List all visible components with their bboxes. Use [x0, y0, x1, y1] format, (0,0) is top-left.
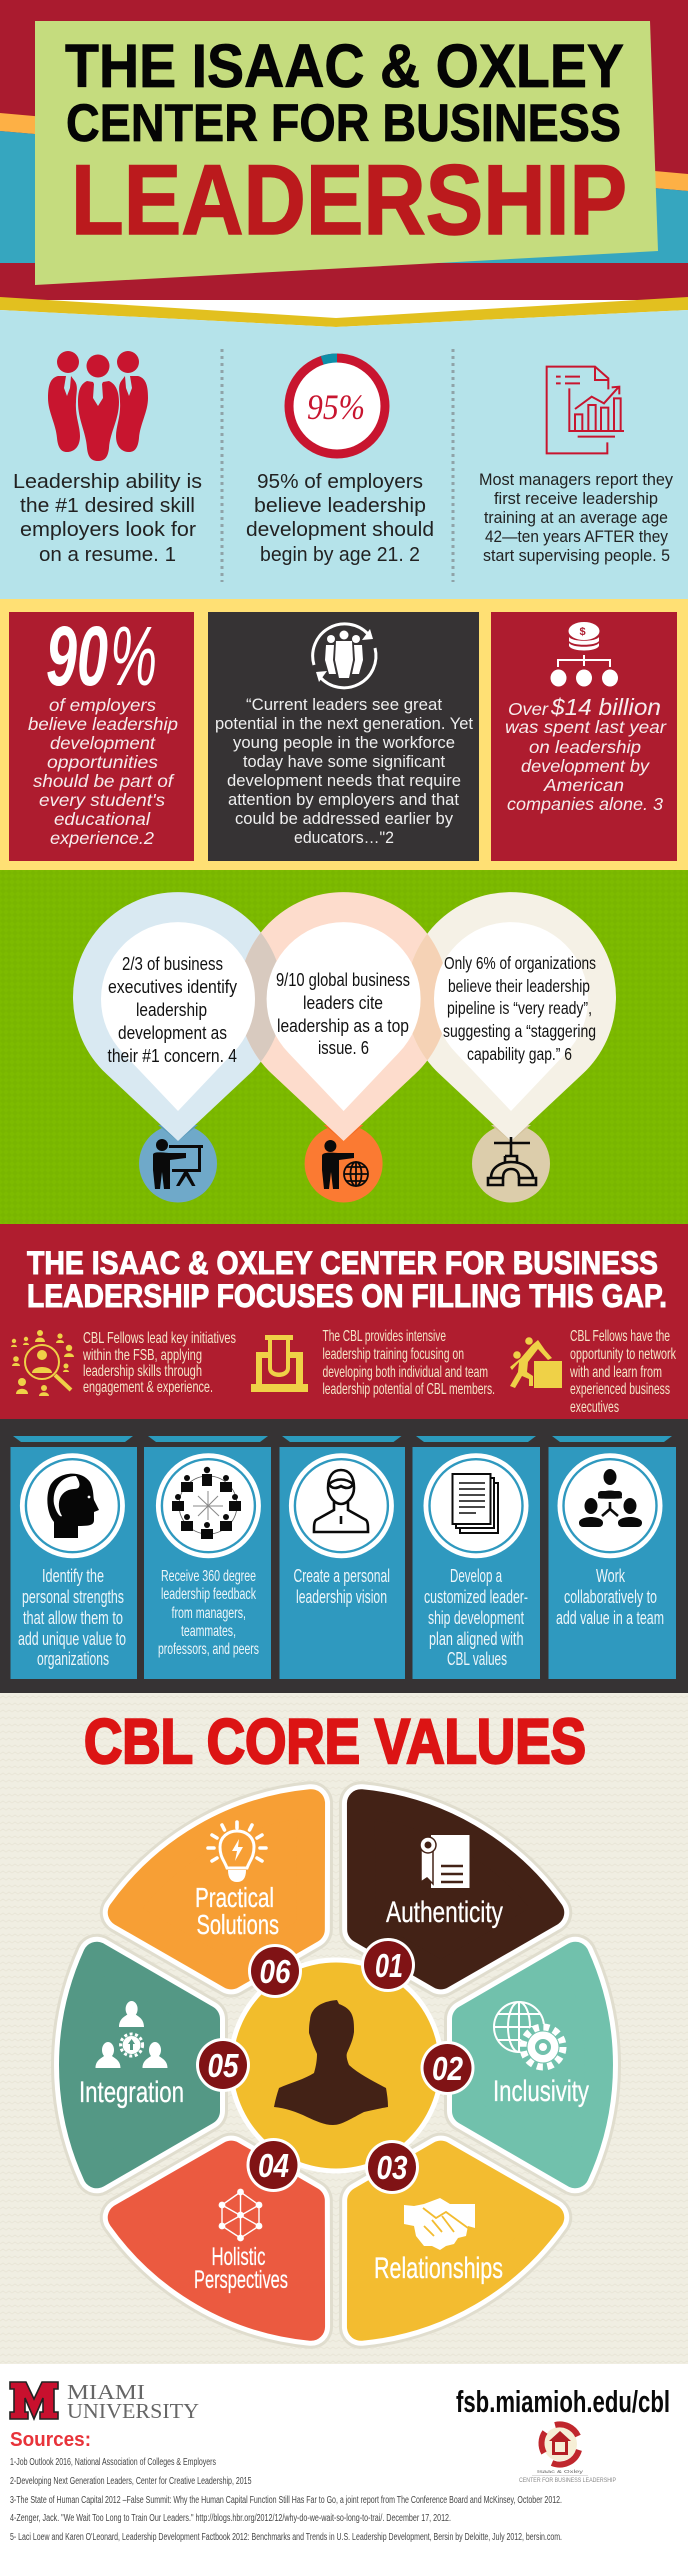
heading: CBL core values: CBL CORE VALUES [84, 1707, 586, 1777]
card: leadership vision [280, 1447, 405, 1679]
badge 03: 03 [376, 2149, 408, 2186]
text: fellows network: executives [570, 1399, 619, 1416]
panel: 90 percent: experience.2 [50, 828, 154, 848]
badge 06: 06 [260, 1953, 291, 1990]
text: quote: today have some significant [243, 753, 445, 771]
text: intensive training: developing both individual and team [322, 1364, 488, 1381]
text: team collaboration [556, 1565, 664, 1628]
title: THE ISAAC & OXLEY [65, 32, 624, 100]
icon: three connected people [579, 1469, 642, 1527]
text: intensive training [322, 1328, 495, 1398]
text: 360 feedback: Receive 360 degree [161, 1568, 256, 1585]
badge 02: 02 [432, 2050, 464, 2087]
heading [27, 1245, 667, 1314]
panel: 90 percent: should be part of [33, 771, 175, 791]
panel: 90 percent: educational [54, 809, 151, 829]
text: leadership ability: on a resume. 1 [39, 544, 176, 566]
label: authenticity: Authenticity [386, 1896, 503, 1929]
text: leadership ability: employers look for [20, 519, 196, 541]
text: 360 feedback [158, 1568, 259, 1658]
text: billion spent: companies alone. 3 [507, 794, 663, 814]
panel: 90 percent: % [110, 609, 157, 703]
header banner [0, 0, 688, 327]
label: relationships: Relationships [374, 2252, 503, 2285]
chart: 95 percent donut [284, 354, 390, 458]
text: leadership ability: the #1 desired skill [20, 495, 195, 517]
icon: magnifier with people [11, 1330, 74, 1396]
panel: filling the gap [0, 1224, 688, 1419]
text: quote: could be addressed earlier by [235, 810, 454, 828]
pin 1: 2/3 of business [122, 954, 223, 974]
logo: center for business leadership: Isaac & Oxley [537, 2469, 584, 2474]
icon: person with globe [322, 1140, 368, 1189]
sources heading: Sources: [10, 2429, 91, 2451]
card: 360 feedback [144, 1447, 271, 1679]
text: leadership vision [294, 1565, 390, 1607]
label: holistic perspectives [194, 2243, 288, 2294]
text: billion spent: American [543, 775, 624, 795]
text: managers report: training at an average age [484, 509, 668, 527]
chart: 95 percent donut: 95% [307, 387, 365, 427]
text: quote: educators…"2 [294, 829, 394, 847]
pin 1: development as [118, 1023, 227, 1043]
pin outlines [73, 892, 616, 1141]
text: intensive training: leadership potential of CBL members. [322, 1381, 495, 1398]
segment 04 holistic perspectives [110, 2123, 366, 2347]
panel: core values [0, 1693, 688, 2364]
badge 05 [196, 2038, 250, 2092]
label: practical solutions [195, 1882, 279, 1940]
text: 95 percent of employers: begin by age 21. 2 [260, 544, 420, 566]
pin 3: believe their leadership [448, 976, 590, 996]
text: fellows lead: leadership skills through [83, 1363, 202, 1380]
label: holistic perspectives: Holistic [212, 2243, 266, 2271]
text: quote [215, 696, 473, 847]
text: quote: potential in the next generation. Yet [215, 715, 473, 733]
text: fellows lead: CBL Fellows lead key initiatives [83, 1330, 236, 1347]
text: 95 percent of employers: 95% of employers [257, 471, 423, 493]
icon circles [139, 1124, 550, 1202]
icon: light bulb [208, 1822, 266, 1882]
icon: training u shape [251, 1335, 308, 1392]
text: managers report: Most managers report they [479, 471, 674, 489]
text: managers report [479, 471, 674, 565]
sources list: 1-Job Outlook 2016, National Association of Colleges & Employers [10, 2457, 216, 2468]
text: fellows network [569, 1328, 677, 1416]
title panel [35, 21, 658, 285]
panel: 90 percent: every student's [39, 790, 165, 810]
panel: 90 percent: development [50, 733, 156, 753]
pin 1: executives identify [108, 977, 237, 997]
logo: Miami University: MIAMI [67, 2380, 145, 2404]
title [65, 32, 627, 255]
badge 01 [361, 1938, 415, 1992]
text: development plan: Develop a [450, 1565, 502, 1586]
icon: globe and gear [494, 2002, 566, 2070]
text: 95 percent of employers: believe leadership [254, 495, 426, 517]
badge 04: 04 [258, 2147, 289, 2184]
panel: program benefits [0, 1419, 688, 1693]
icon: handshake [404, 2198, 475, 2250]
text: billion spent: on leadership [529, 737, 641, 757]
text: 360 feedback: from managers, [172, 1605, 246, 1622]
text: leadership vision: Create a personal [294, 1565, 390, 1586]
badge 01: 01 [375, 1947, 403, 1984]
segment 03 relationships [306, 2123, 562, 2347]
panel: quote [208, 612, 479, 861]
segment 02 inclusivity [466, 1956, 599, 2174]
icon: leadership circle [172, 1467, 241, 1539]
text: managers report: first receive leadership [494, 490, 658, 508]
icon: coins and tree: $ [580, 626, 586, 638]
pin 1: leadership [136, 1000, 207, 1020]
icon: certificate [420, 1835, 470, 1888]
text: development plan [424, 1565, 528, 1669]
logo: center for business leadership [519, 2424, 616, 2484]
wheel outline [73, 1783, 599, 2347]
pin 1: their #1 concern. 4 [108, 1046, 237, 1066]
panel: 90 percent [9, 609, 194, 861]
panel: 90 percent: 90 [46, 609, 108, 703]
panel: 90 percent: of employers [49, 695, 156, 715]
text: leadership ability: Leadership ability is [13, 471, 202, 493]
text: personal strengths: organizations [37, 1648, 109, 1669]
segment 05 integration [73, 1956, 206, 2174]
icon: people with circular arrows [313, 624, 376, 688]
logo: Miami University: UNIVERSITY [67, 2399, 199, 2423]
panel: 90 percent: believe leadership [28, 714, 178, 734]
text: leadership ability [13, 471, 202, 566]
icon: head [47, 1474, 99, 1538]
text: personal strengths [18, 1565, 126, 1669]
center circle with person silhouette [228, 1958, 444, 2174]
icon: report with chart [547, 367, 624, 453]
text: 95 percent of employers [246, 471, 434, 566]
pin 2: leaders cite [303, 993, 383, 1013]
text: personal strengths: personal strengths [22, 1586, 124, 1607]
text: personal strengths: Identify the [42, 1565, 104, 1586]
icon: outline person [314, 1470, 368, 1532]
icon: climbing onto box [510, 1337, 562, 1388]
sources list: 2-Developing Next Generation Leaders, Center for Creative Leadership, 2015 [10, 2476, 252, 2487]
segment 01 authenticity [306, 1783, 562, 2007]
panel: 14 billion [491, 612, 677, 861]
badge 02 [420, 2041, 474, 2095]
icon: pipe valve [488, 1137, 536, 1185]
text: 360 feedback: professors, and peers [158, 1641, 259, 1658]
sources list: 4-Zenger, Jack. "We Wait Too Long to Train Our Leaders." http://blogs.hbr.org/2012/12/why-do-we-wait-so-long-to-trai/. December 17, 2012. [10, 2513, 451, 2524]
badge 03 [365, 2140, 419, 2194]
title: CENTER FOR BUSINESS [66, 94, 621, 153]
text: quote: young people in the workforce [233, 734, 455, 752]
icon: people and gear [96, 2001, 168, 2068]
icon: presenter [153, 1139, 203, 1189]
badge 06 [248, 1944, 302, 1998]
badge 05: 05 [208, 2047, 239, 2084]
text: quote: “Current leaders see great [246, 696, 442, 714]
pin 2: issue. 6 [318, 1038, 369, 1058]
text: 360 feedback: leadership feedback [161, 1586, 257, 1603]
text: quote: attention by employers and that [228, 791, 459, 809]
card: team collaboration [548, 1447, 676, 1679]
footer [0, 2364, 688, 2560]
card: personal strengths [10, 1447, 137, 1679]
text: team collaboration: Work [596, 1565, 626, 1586]
text: development plan: customized leader- [424, 1586, 528, 1607]
text: managers report: 42—ten years AFTER they [485, 528, 669, 546]
text: leadership vision: leadership vision [296, 1586, 387, 1607]
label: holistic perspectives: Perspectives [194, 2266, 288, 2294]
pin 2 [267, 922, 421, 1111]
text: 95 percent of employers: development should [246, 519, 434, 541]
icon: documents [452, 1474, 498, 1533]
pin 3 [434, 922, 596, 1111]
text: quote: development needs that require [227, 772, 461, 790]
panel: yellow band of key facts [0, 599, 688, 870]
label: practical solutions: Practical [195, 1882, 274, 1913]
pin 3: capability gap.” 6 [467, 1044, 572, 1064]
panel: 90 percent: opportunities [47, 752, 158, 772]
text: 360 feedback: teammates, [181, 1623, 236, 1640]
icon: network [219, 2189, 262, 2241]
text: intensive training: The CBL provides intensive [322, 1328, 446, 1345]
text: billion spent: $14 billion [550, 694, 661, 720]
panel: green pins [0, 870, 688, 1224]
pin 2: leadership as a top [277, 1016, 409, 1036]
badge 04 [246, 2138, 300, 2192]
text: personal strengths: add unique value to [18, 1628, 126, 1649]
text: development plan: ship development [428, 1607, 524, 1628]
label: inclusivity: Inclusivity [493, 2075, 589, 2108]
logo: Miami University [10, 2380, 199, 2423]
card: development plan [412, 1447, 540, 1679]
text: billion spent [505, 694, 667, 814]
text: personal strengths: that allow them to [23, 1607, 123, 1628]
pin 2: 9/10 global business [276, 970, 410, 990]
text: billion spent: Over [508, 699, 549, 719]
label: practical solutions: Solutions [196, 1909, 279, 1940]
logo: center for business leadership: CENTER FOR BUSINESS LEADERSHIP [519, 2477, 616, 2484]
pin 3: pipeline is “very ready”, [447, 998, 592, 1018]
text: fellows lead: within the FSB, applying [82, 1347, 202, 1364]
icon: three business people [48, 351, 148, 461]
text: billion spent: development by [521, 756, 650, 776]
icon: coins and tree [550, 622, 618, 686]
segment 06 practical solutions [110, 1783, 366, 2007]
text: billion spent: was spent last year [505, 717, 667, 737]
text: fellows lead: engagement & experience. [83, 1379, 213, 1396]
pin 3: Only 6% of organizations [444, 953, 596, 973]
text: development plan: CBL values [447, 1648, 507, 1669]
sources list [10, 2457, 562, 2543]
pin 1 [101, 922, 255, 1111]
text: managers report: start supervising people. 5 [483, 547, 670, 565]
text: development plan: plan aligned with [429, 1628, 524, 1649]
panel: top statistics [0, 310, 688, 599]
pin 3: suggesting a “staggering [443, 1021, 596, 1041]
text: fellows lead [82, 1330, 236, 1396]
text: intensive training: leadership training focusing on [322, 1346, 464, 1363]
label: integration: Integration [79, 2076, 184, 2109]
